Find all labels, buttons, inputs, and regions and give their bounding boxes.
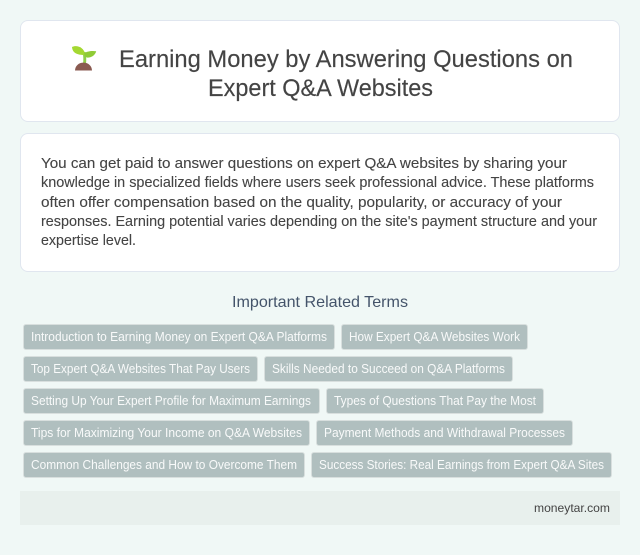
panel: description [20,133,620,272]
description text [41,156,597,249]
description text: knowledge in specialized fields where users seek professional advice. These platforms [41,175,594,191]
tag labels: Setting Up Your Expert Profile for Maximum Earnings [31,394,311,408]
description text: often offer compensation based on the quality, popularity, or accuracy of your [41,195,562,211]
tag: top websites [23,356,258,382]
tag: skills [264,356,513,382]
title: Earning Money by Answering Questions on [119,46,573,73]
tag labels: Success Stories: Real Earnings from Expert Q&A Sites [319,458,604,472]
tag labels: How Expert Q&A Websites Work [349,330,521,344]
tag labels: Common Challenges and How to Overcome Them [31,458,297,472]
tag: how it works [341,324,528,350]
description text: expertise level. [41,233,136,249]
tag labels: Introduction to Earning Money on Expert Q&A Platforms [31,330,327,344]
tag: introduction [23,324,335,350]
tag labels: Payment Methods and Withdrawal Processes [324,426,565,440]
tag: payment methods [316,420,573,446]
description text: responses. Earning potential varies depending on the site's payment structure and your [41,214,597,230]
icon: seedling [72,46,96,70]
tag: success stories [311,452,612,478]
footer credit: moneytar.com [534,501,610,515]
tag: challenges [23,452,305,478]
footer bar [20,491,620,525]
title [119,46,573,102]
tag: question types [326,388,544,414]
tag labels [31,330,604,472]
tag labels: Tips for Maximizing Your Income on Q&A Websites [31,426,302,440]
panel: header [20,20,620,122]
tag labels: Skills Needed to Succeed on Q&A Platforms [272,362,505,376]
tag: income tips [23,420,310,446]
tag labels: Top Expert Q&A Websites That Pay Users [31,362,250,376]
tag labels: Types of Questions That Pay the Most [334,394,536,408]
tag: profile [23,388,320,414]
title: Expert Q&A Websites [208,75,433,102]
description text: You can get paid to answer questions on expert Q&A websites by sharing your [41,156,567,172]
heading: related terms: Important Related Terms [232,294,408,311]
